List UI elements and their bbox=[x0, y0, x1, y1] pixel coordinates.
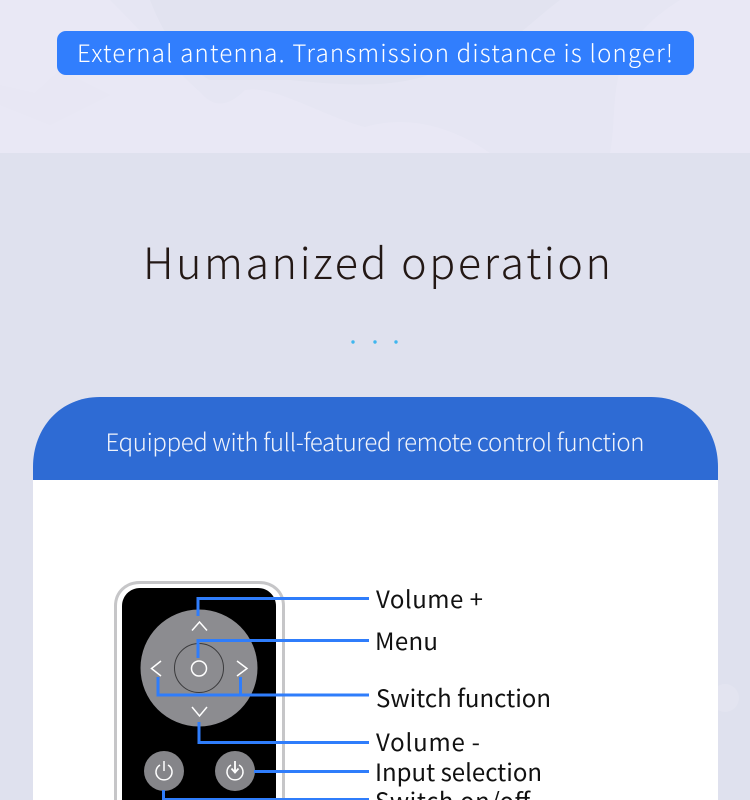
direction arrows bbox=[152, 622, 247, 716]
panel subtitle: Equipped with full-featured remote control function bbox=[106, 423, 644, 458]
heading: Humanized operation bbox=[143, 230, 611, 292]
panel: remote control bbox=[33, 397, 718, 800]
antenna banner: External antenna. Transmission distance is longer! bbox=[77, 34, 673, 69]
power button bbox=[144, 751, 184, 791]
callout labels: Menu bbox=[375, 622, 438, 657]
callout labels: Switch function bbox=[376, 679, 551, 714]
remote control bbox=[116, 582, 284, 800]
input button bbox=[215, 751, 255, 791]
callout labels bbox=[375, 580, 551, 800]
callout labels: Volume + bbox=[376, 580, 483, 615]
heading dots bbox=[351, 340, 398, 344]
remote body bbox=[116, 582, 284, 800]
callout lines bbox=[158, 598, 369, 800]
callout labels: Input selection bbox=[375, 753, 542, 788]
direction pad bbox=[140, 610, 258, 726]
panel header bbox=[33, 397, 718, 480]
center button bbox=[174, 644, 224, 692]
callout labels: Volume - bbox=[376, 723, 480, 758]
panel body bbox=[33, 470, 718, 800]
